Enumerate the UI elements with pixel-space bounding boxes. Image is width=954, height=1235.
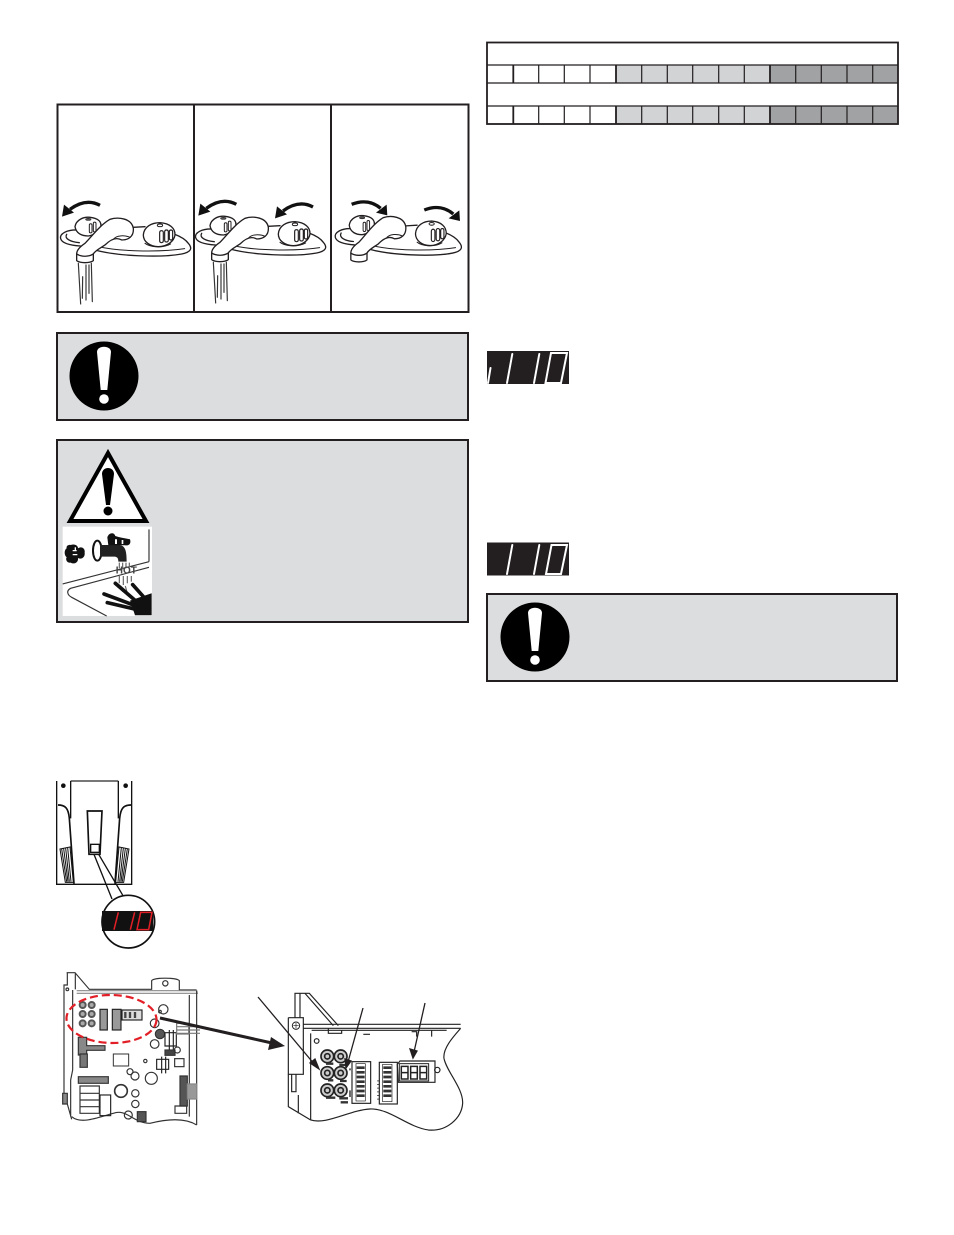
diagram: control board detail bbox=[288, 993, 463, 1130]
display: LED readout with leading segment bbox=[487, 351, 569, 384]
component cluster circled in red bbox=[80, 1002, 142, 1030]
terminal blocks bbox=[350, 1062, 397, 1104]
panel: settings table bbox=[487, 42, 898, 124]
arrow: overview to detail bbox=[160, 1018, 285, 1050]
icon: scald hazard hand under faucet bbox=[63, 527, 152, 616]
faucet: hot handle open bbox=[61, 202, 191, 304]
diagram: water heater front with display callout bbox=[57, 781, 155, 948]
faucet: both handles closed bbox=[335, 202, 461, 262]
highlight: red dashed ellipse bbox=[66, 994, 157, 1044]
table row 2 cells bbox=[616, 106, 898, 124]
callout arrow: potentiometers bbox=[258, 997, 319, 1069]
panel: notice box right column bbox=[487, 594, 897, 681]
icon: exclamation disc bbox=[500, 602, 570, 672]
panel: notice box with exclamation mark bbox=[57, 333, 468, 420]
diagram: control board overview bbox=[63, 973, 200, 1125]
display: LED readout bbox=[487, 542, 569, 576]
three digit display module bbox=[397, 1061, 440, 1082]
icon: exclamation disc bbox=[70, 342, 138, 410]
callout arrow: display bbox=[410, 1003, 425, 1058]
potentiometers bbox=[321, 1050, 347, 1097]
faucet: both handles open bbox=[196, 201, 326, 303]
panel: faucet operation illustrations bbox=[58, 104, 468, 312]
icon: scald hazard hand under faucet: HOT bbox=[116, 566, 137, 577]
table row 1 cells bbox=[616, 65, 898, 83]
panel: hot water warning box bbox=[57, 440, 468, 622]
icon: warning triangle bbox=[70, 453, 146, 521]
callout arrow: terminal blocks bbox=[345, 1008, 363, 1068]
